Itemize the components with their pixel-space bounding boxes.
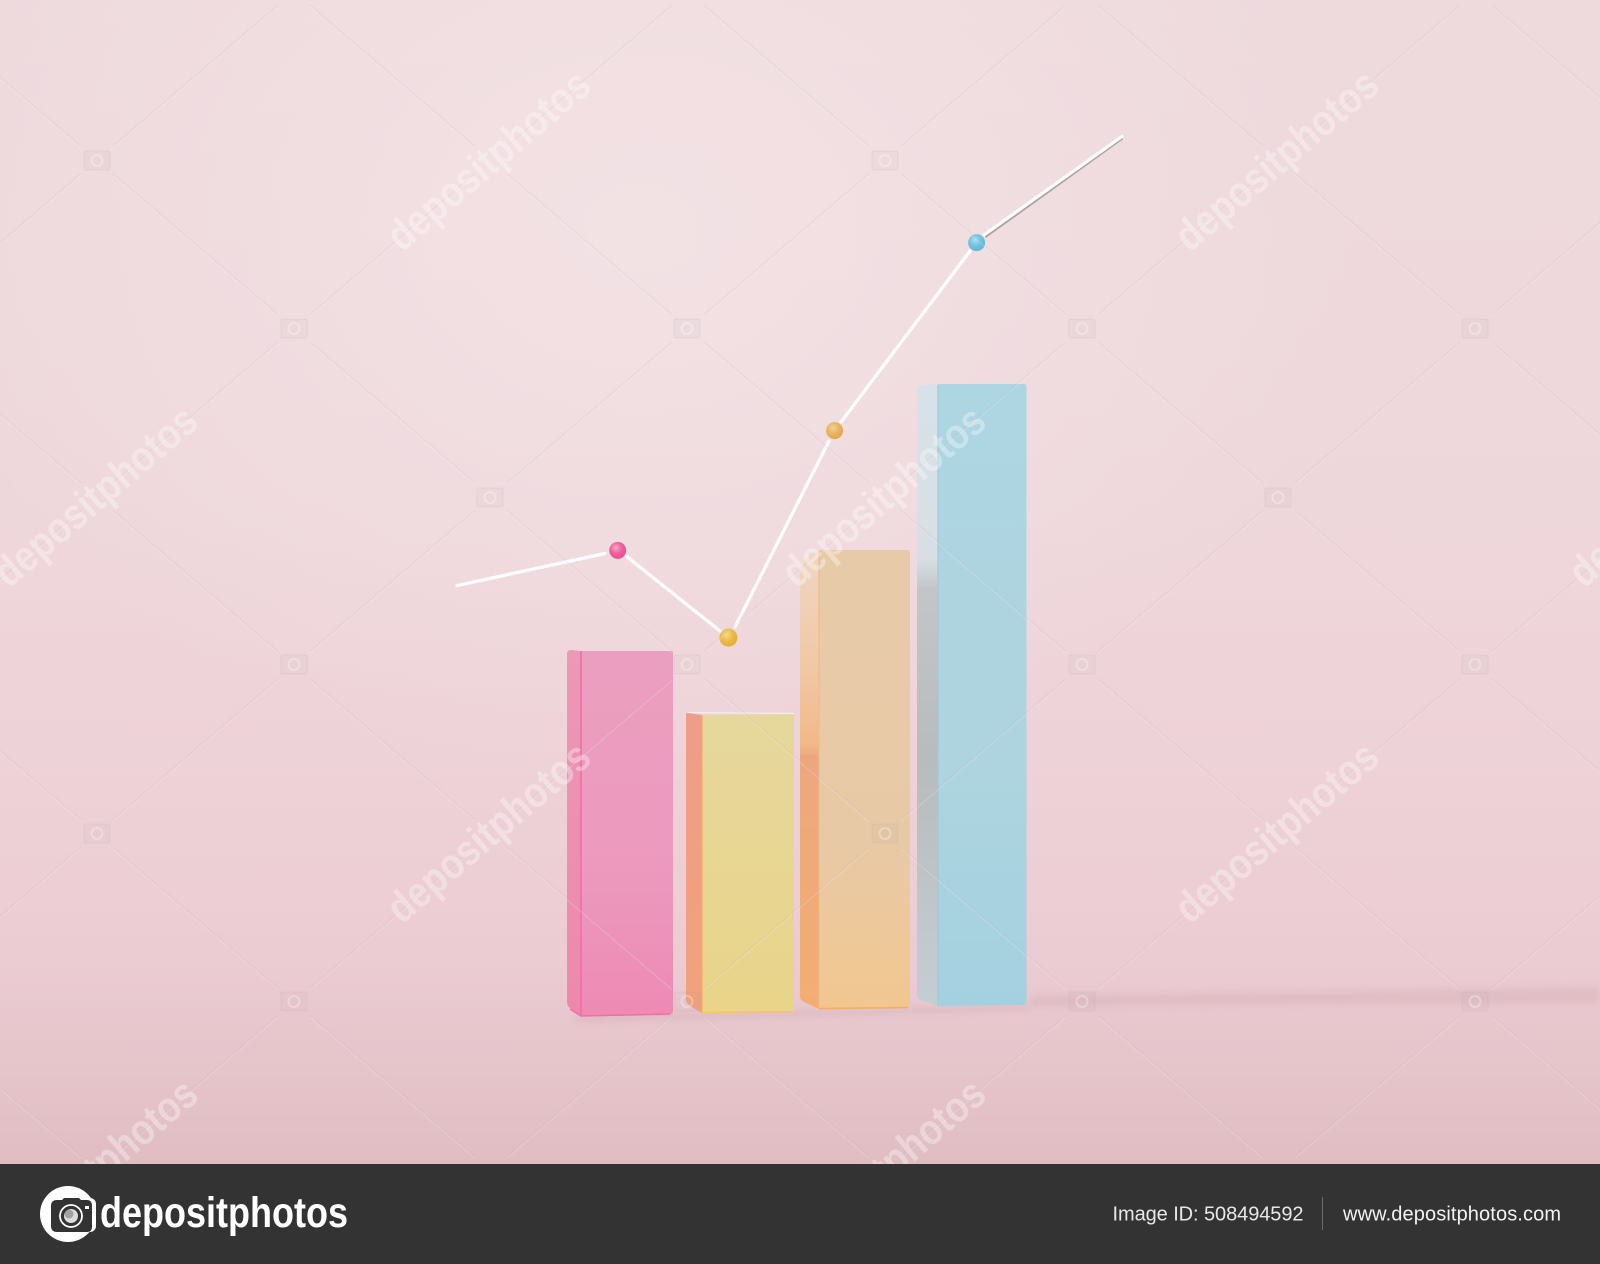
watermark text: depositphotos (772, 1069, 995, 1264)
watermark text: depositphotos (377, 60, 600, 261)
bar chart (567, 384, 1026, 1016)
divider (1322, 1197, 1323, 1230)
line shadow (985, 138, 1122, 236)
bar 3: orange (800, 550, 910, 1009)
trend line (457, 136, 1122, 647)
watermark text: depositphotos (1165, 60, 1388, 261)
data points (609, 234, 985, 647)
bar 4: blue (917, 384, 1026, 1006)
bar 2: yellow (686, 712, 794, 1013)
watermark text: depositphotos (1165, 732, 1388, 933)
watermark text: depositphotos (772, 396, 995, 597)
footer logo wordmark: depositphotos (100, 1188, 348, 1236)
website url: www.depositphotos.com (1342, 1204, 1561, 1226)
bar 1: pink (567, 650, 673, 1016)
floor shadow of the bars (575, 987, 1600, 1022)
watermark text: depositphotos (377, 732, 600, 933)
line segments (457, 136, 1122, 631)
image id: Image ID: 508494592 (1112, 1204, 1304, 1226)
watermark camera icons (84, 151, 1488, 1011)
footer logo icon: camera in circle (40, 1186, 96, 1242)
footer bar (0, 1164, 1600, 1264)
